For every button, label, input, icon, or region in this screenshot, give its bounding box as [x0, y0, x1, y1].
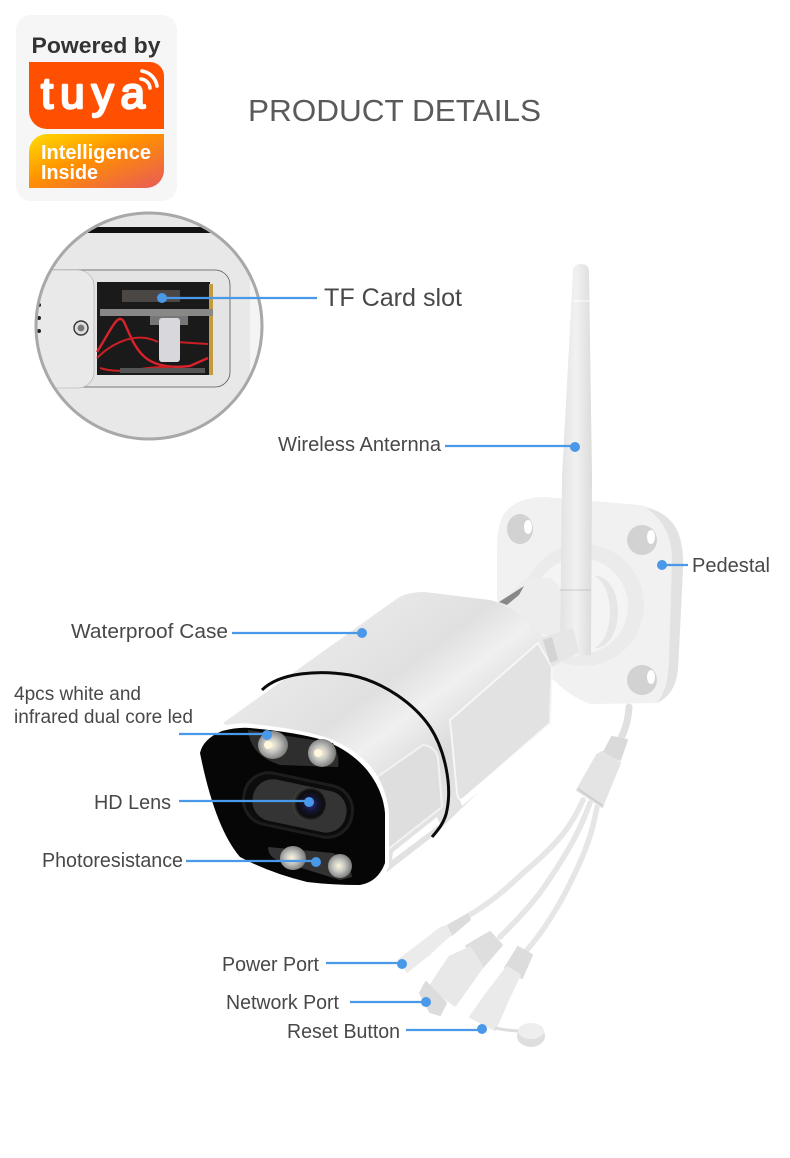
- callout: LED: infrared dual core led: [14, 707, 193, 728]
- side panel inset: [450, 643, 552, 800]
- top LED pod: [248, 730, 338, 767]
- pedestal screw holes: [507, 514, 657, 695]
- camera body: [197, 592, 552, 889]
- bottom LED pod: [268, 846, 352, 880]
- inset: TF card slot close-up: [20, 213, 264, 439]
- callout: Pedestal: Pedestal: [692, 555, 770, 577]
- callout: Photoresistance: [42, 850, 321, 872]
- lens housing: [239, 768, 357, 842]
- title: PRODUCT DETAILS: [248, 93, 541, 128]
- callout: Wireless Anternna: [278, 434, 580, 456]
- callout: LED: [14, 684, 272, 740]
- callout: Waterproof Case: Waterproof Case: [71, 621, 228, 643]
- logo: intelligence inside block: Intelligence: [41, 142, 151, 164]
- callout: TF Card slot: TF Card slot: [324, 284, 462, 312]
- callout: Network Port: [226, 992, 431, 1014]
- logo: Powered by tuya: [16, 15, 177, 201]
- network plug: [420, 932, 502, 1015]
- callout: LED: 4pcs white and: [14, 684, 141, 705]
- callout: Waterproof Case: [71, 621, 367, 643]
- black seam ring: [262, 673, 449, 837]
- callout: TF Card slot: [157, 284, 462, 312]
- logo heading: Powered by: [32, 33, 161, 58]
- callout: Reset Button: [287, 1021, 487, 1043]
- pedestal mounting plate: [497, 497, 683, 704]
- logo: tuya orange block: [29, 62, 164, 129]
- callout: Wireless Anternna: Wireless Anternna: [278, 434, 442, 456]
- callout: Pedestal: [657, 555, 770, 577]
- black face: [200, 728, 385, 885]
- logo: intelligence inside block: [29, 134, 164, 188]
- callout: Power Port: [222, 954, 407, 976]
- logo: tuya orange block: tuya: [41, 69, 146, 118]
- pedestal arm: [497, 578, 570, 640]
- power plug: [397, 913, 471, 973]
- callout: HD Lens: HD Lens: [94, 792, 171, 814]
- splitter: [577, 737, 627, 807]
- reset plug: [470, 947, 545, 1047]
- front rim: [197, 723, 389, 889]
- wireless antenna: [540, 264, 592, 667]
- front panel inset: [377, 745, 442, 850]
- callout: Power Port: Power Port: [222, 954, 319, 976]
- callout: Reset Button: Reset Button: [287, 1021, 400, 1043]
- callout: HD Lens: [94, 792, 314, 814]
- logo: intelligence inside block: Inside: [41, 162, 98, 184]
- callout: Photoresistance: Photoresistance: [42, 850, 183, 872]
- cables: [468, 707, 629, 950]
- callout: Network Port: Network Port: [226, 992, 339, 1014]
